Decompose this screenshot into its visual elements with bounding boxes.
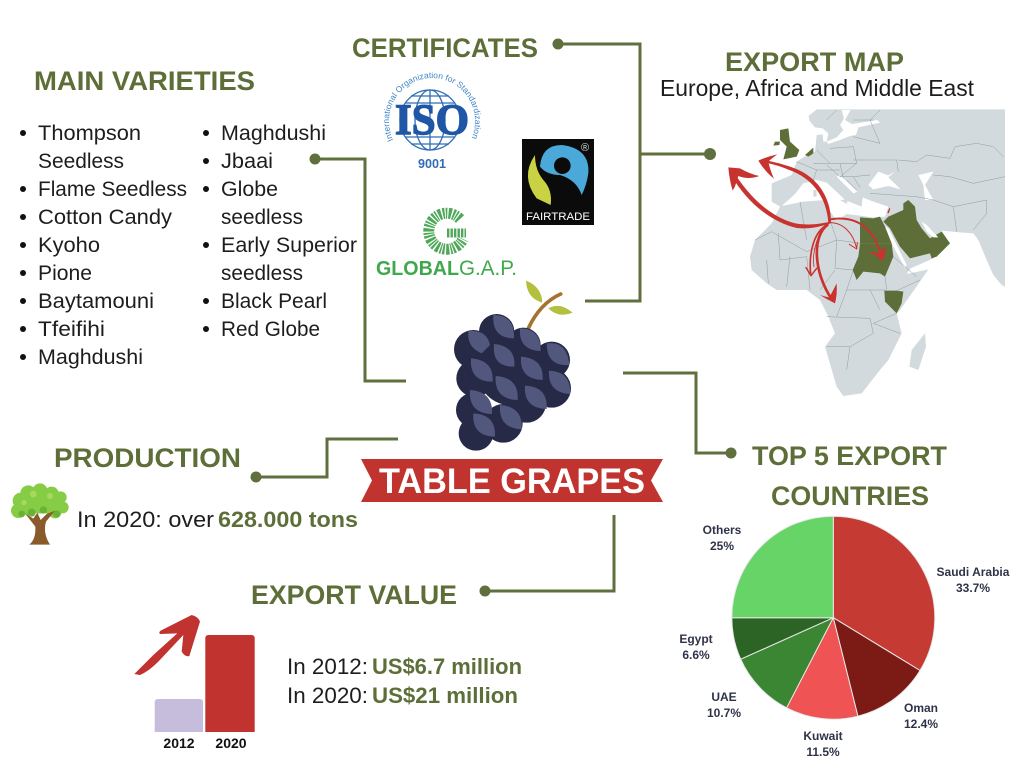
icon: tree	[11, 483, 69, 545]
text: export values: US$6.7 million	[372, 654, 522, 679]
heading: certificates: CERTIFICATES	[352, 33, 538, 63]
list: varieties column one: Kyoho	[38, 234, 100, 257]
connector: production	[250, 439, 398, 482]
pie labels: Others	[703, 523, 742, 537]
heading: export value: EXPORT VALUE	[251, 580, 457, 610]
list: varieties column two: Jbaai	[221, 150, 273, 173]
pie labels: 6.6%	[682, 648, 710, 662]
list: varieties column one: Pione	[38, 262, 92, 285]
map: Europe, Africa and Middle East	[728, 109, 1005, 396]
pie labels: UAE	[711, 690, 737, 704]
pie labels: 12.4%	[904, 717, 938, 731]
heading: main varieties: MAIN VARIETIES	[34, 66, 255, 96]
icon: GlobalG.A.P. logo: G.A.P.	[459, 257, 517, 280]
icon: ISO 9001 logo: 9001	[418, 157, 446, 171]
connector: certificates	[552, 38, 640, 301]
text: production figure: 628.000 tons	[218, 507, 358, 532]
icon: bunch of grapes	[454, 281, 573, 451]
seas	[782, 110, 933, 268]
heading: production: PRODUCTION	[54, 443, 241, 473]
list: varieties column one: Baytamouni	[38, 290, 154, 313]
pie labels: 10.7%	[707, 706, 741, 720]
pie labels: Oman	[904, 701, 938, 715]
pie labels	[679, 523, 1010, 759]
icon: Fairtrade logo: ®	[581, 142, 589, 154]
heading: top 5 export countries: TOP 5 EXPORT	[752, 441, 947, 471]
list: varieties column two: Globe	[221, 178, 278, 201]
list: varieties column two: Maghdushi	[221, 122, 326, 145]
list: varieties column one	[20, 122, 187, 369]
map land	[750, 109, 1005, 396]
text: production figure: In 2020: over	[77, 507, 215, 532]
list: varieties column two: Early Superior	[221, 234, 357, 257]
map: export arrows	[728, 154, 886, 303]
connector: top 5 export countries	[623, 373, 736, 458]
pie labels: Saudi Arabia	[937, 565, 1010, 579]
slice: Egypt	[732, 618, 833, 659]
arrow: growth	[134, 615, 200, 675]
text: export values: US$21 million	[372, 683, 518, 708]
icon: Fairtrade logo: FAIRTRADE	[526, 211, 590, 223]
list: varieties column one: Tfeifihi	[38, 318, 105, 341]
map: highlighted countries	[773, 128, 950, 313]
list: varieties column two: seedless	[221, 262, 303, 285]
list: varieties column one: Flame Seedless	[38, 178, 187, 201]
list: varieties column two: Black Pearl	[221, 290, 327, 313]
list: varieties column one: Seedless	[38, 150, 124, 173]
text: production figure	[77, 507, 358, 532]
subheading: export map regions: Europe, Africa and Middle East	[660, 75, 975, 101]
pie labels: 25%	[710, 539, 734, 553]
heading: top 5 export countries: COUNTRIES	[771, 481, 929, 511]
chart: export value bars: 2020	[215, 735, 247, 751]
list: varieties column two: seedless	[221, 206, 303, 229]
icon: GlobalG.A.P. logo: GLOBAL	[376, 257, 459, 280]
banner: table grapes title: TABLE GRAPES	[379, 462, 645, 501]
list: varieties column two	[203, 122, 357, 341]
pie labels: Kuwait	[803, 729, 843, 743]
chart: export value bars: 2012	[163, 735, 195, 751]
slice: Saudi Arabia	[833, 516, 935, 670]
slice: UAE	[741, 618, 833, 708]
slice: Oman	[833, 618, 920, 716]
list: varieties column one: Thompson	[38, 122, 141, 145]
heading: top 5 export countries	[752, 441, 947, 511]
slice: Others	[732, 516, 833, 618]
text: export values	[287, 654, 522, 708]
connector: main varieties	[310, 154, 406, 381]
chart: export value bars	[155, 635, 255, 751]
list: varieties column two: Red Globe	[221, 318, 320, 341]
text: export values: In 2012:	[287, 654, 368, 679]
list: varieties column one: Cotton Candy	[38, 206, 173, 229]
pie labels: 11.5%	[806, 745, 840, 759]
slice: Kuwait	[787, 618, 858, 719]
list: varieties column one: Maghdushi	[38, 346, 143, 369]
pie labels: 33.7%	[956, 581, 990, 595]
icon: ISO 9001 logo: International Organization for Standardization	[384, 72, 481, 142]
icon: GlobalG.A.P. logo	[376, 213, 517, 280]
heading: export map: EXPORT MAP	[725, 47, 904, 77]
icon: ISO 9001 logo	[384, 72, 481, 171]
Madagascar	[909, 333, 926, 370]
icon: ISO 9001 logo: ISO	[395, 97, 469, 144]
connector: export map	[640, 148, 716, 160]
chart: export countries pie	[732, 516, 935, 719]
icon: Fairtrade logo	[522, 139, 594, 225]
connector: export value	[480, 515, 614, 596]
Italy and islands	[813, 175, 860, 204]
text: export values: In 2020:	[287, 683, 368, 708]
borders	[755, 110, 1005, 370]
pie labels: Egypt	[679, 632, 713, 646]
